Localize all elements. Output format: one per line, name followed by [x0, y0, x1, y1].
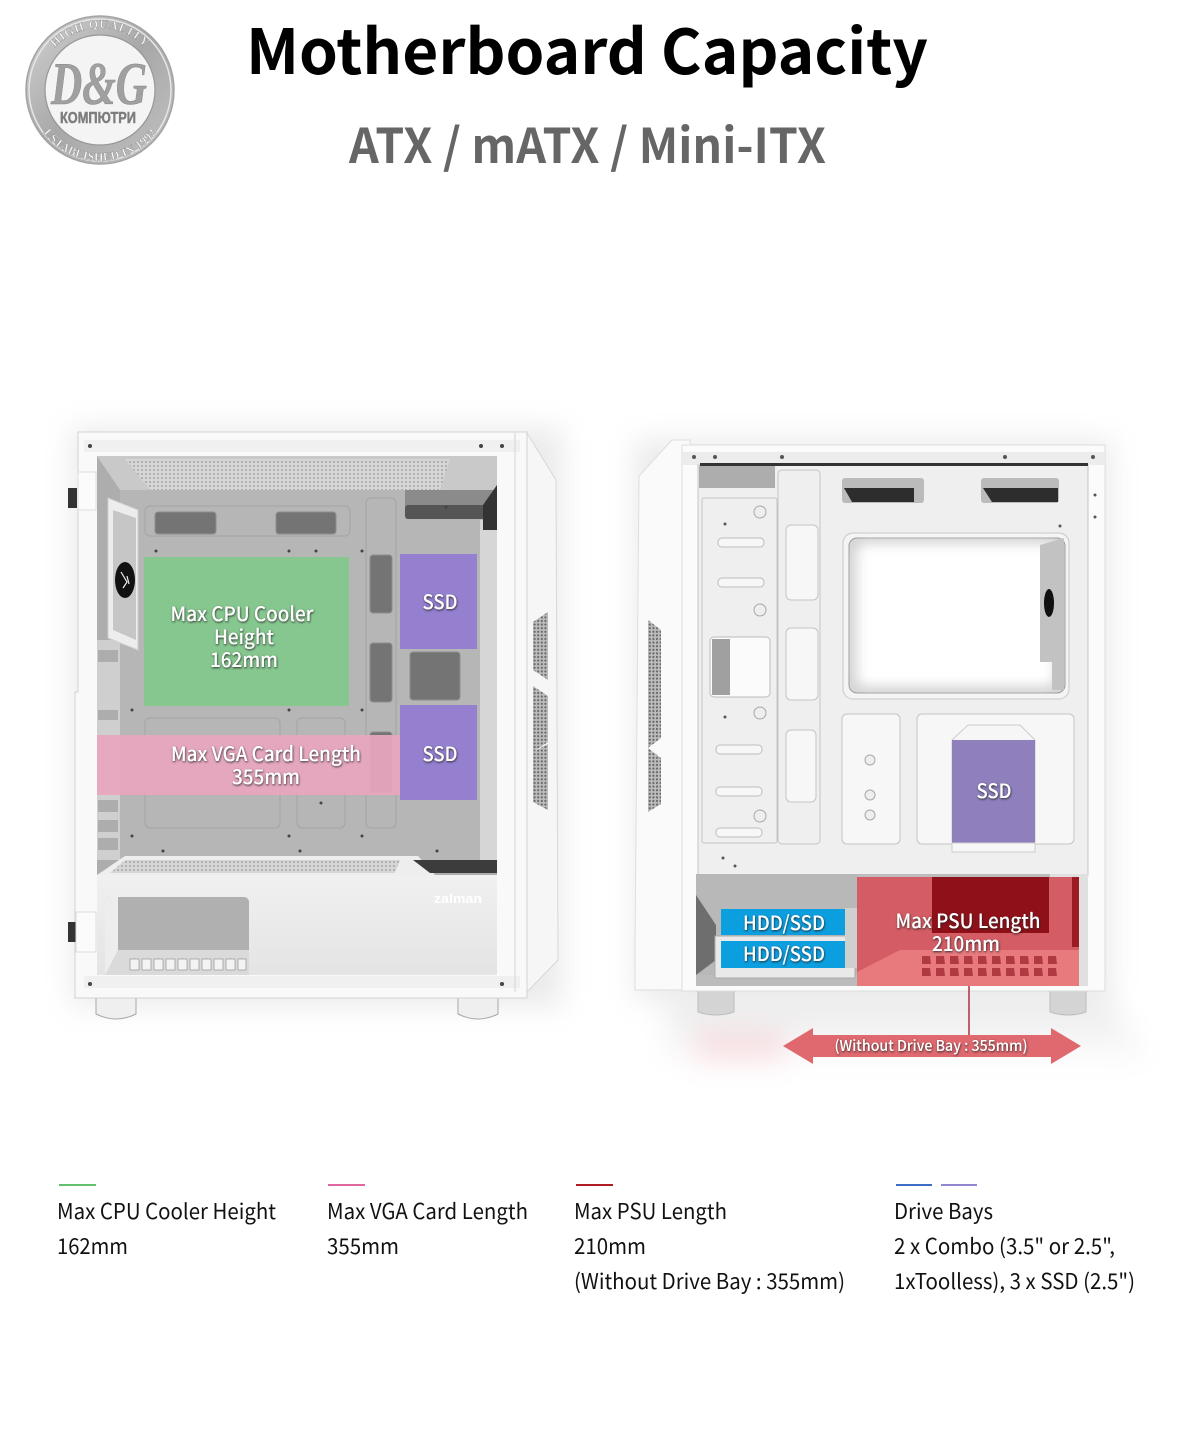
logo: D&G badge: ESTABLISHED IN 1992 — [43, 128, 156, 162]
highlight: HDD/SSD top: HDD/SSD — [743, 907, 825, 936]
legend: max PSU length: Max PSU Length — [574, 1195, 727, 1226]
left case frame — [75, 432, 527, 998]
legend: max CPU cooler height: 162mm — [57, 1230, 128, 1261]
highlight: max VGA card length: Max VGA Card Length — [171, 738, 361, 767]
subtitle: ATX / mATX / Mini-ITX — [348, 107, 826, 177]
right case feet — [698, 990, 1086, 1015]
rear fan — [108, 498, 138, 650]
highlight: max CPU cooler height: Height — [214, 621, 274, 650]
right side radiator fans strip — [480, 520, 497, 860]
legend: max PSU length: (Without Drive Bay : 355mm) — [574, 1265, 845, 1296]
highlight: SSD top: SSD — [422, 586, 458, 615]
highlight: max VGA card length: 355mm — [232, 761, 300, 790]
left case front bezel — [515, 433, 558, 992]
bottom mesh — [97, 856, 435, 875]
highlight: max CPU cooler height — [144, 557, 349, 706]
legend: max VGA card length: 355mm — [327, 1230, 399, 1261]
highlight: SSD — [952, 725, 1035, 852]
highlight: max PSU length: Max PSU Length — [896, 905, 1040, 934]
legend: drive bays: 2 x Combo (3.5" or 2.5", — [894, 1230, 1115, 1261]
panel: right case back view — [635, 440, 1105, 1064]
highlight: max PSU length — [857, 877, 1079, 986]
vents — [648, 620, 661, 812]
title: Motherboard Capacity — [246, 2, 928, 92]
legend: max PSU length — [574, 1184, 845, 1296]
legend: max PSU length: 210mm — [574, 1230, 646, 1261]
connector line — [968, 986, 970, 1036]
plate recess outlines — [786, 525, 1074, 844]
highlight: HDD/SSD bottom — [721, 938, 845, 968]
dimension arrow: without drive bay 355mm — [783, 1028, 1081, 1064]
floor reflection — [660, 996, 1160, 1070]
logo: D&G badge: D&G — [50, 51, 147, 117]
highlight: SSD bottom: SSD — [422, 738, 458, 767]
logo: D&G badge: КОМПЮТРИ — [60, 110, 136, 127]
PSU shroud — [97, 875, 497, 975]
shroud cutout — [105, 897, 249, 975]
highlight: SSD top — [400, 554, 477, 649]
highlight: HDD/SSD bottom: HDD/SSD — [743, 938, 825, 967]
top cable slots — [842, 478, 1059, 503]
legend: max VGA card length: Max VGA Card Length — [327, 1195, 528, 1226]
logo: D&G badge: HIGH QUALITY — [49, 20, 150, 48]
highlight: SSD bottom — [400, 705, 477, 800]
motherboard tray — [120, 490, 497, 860]
plate slots — [716, 538, 764, 837]
highlight: max VGA card length — [97, 735, 400, 795]
legend: drive bays: 1xToolless), 3 x SSD (2.5") — [894, 1265, 1135, 1296]
panel: left case interior view: zalman — [434, 891, 482, 906]
standoffs — [754, 506, 875, 822]
frame screws — [692, 455, 1096, 868]
top mesh — [97, 456, 497, 490]
right case frame — [682, 445, 1105, 991]
tray recess outlines — [145, 498, 396, 828]
top corner detail — [699, 466, 775, 488]
side hinges — [68, 488, 77, 942]
central window — [843, 533, 1069, 699]
soft shadow behind cases — [72, 428, 1111, 1006]
legend: max CPU cooler height — [57, 1184, 276, 1261]
highlight: max CPU cooler height: Max CPU Cooler — [170, 598, 314, 627]
cutouts — [155, 512, 460, 792]
legend: drive bays — [894, 1184, 1135, 1296]
legend: max VGA card length — [327, 1184, 528, 1261]
highlight: max CPU cooler height: 162mm — [210, 644, 278, 673]
window fan — [1040, 538, 1064, 690]
right case front bezel — [635, 440, 690, 990]
legend: max CPU cooler height: Max CPU Cooler Height — [57, 1195, 276, 1226]
legend: drive bays: Drive Bays — [894, 1195, 993, 1226]
front mesh vents — [533, 612, 548, 810]
screw holes — [88, 444, 504, 986]
logo: D&G badge — [25, 15, 175, 165]
back plate — [698, 465, 1088, 875]
side cutout — [710, 637, 770, 697]
dimension arrow: without drive bay 355mm: (Without Drive Bay : 355mm) — [834, 1035, 1028, 1056]
interior opening — [97, 456, 497, 975]
panel: left case interior view — [68, 432, 558, 1019]
PCI slots — [97, 640, 120, 860]
left case feet — [96, 996, 498, 1019]
highlight: SSD: SSD — [976, 775, 1012, 804]
lower bay — [696, 874, 1088, 986]
highlight: max PSU length: 210mm — [932, 928, 1000, 957]
